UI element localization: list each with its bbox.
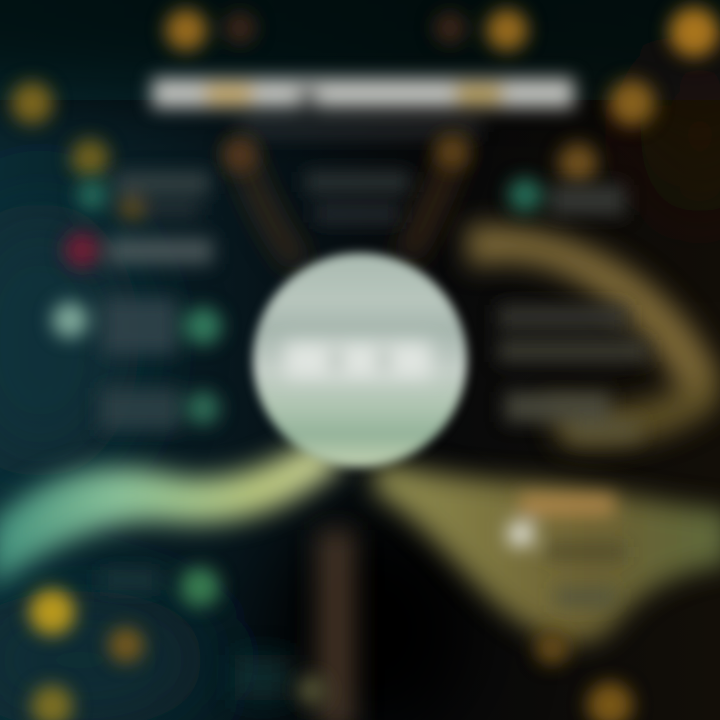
central circle bbox=[253, 253, 467, 467]
title bbox=[152, 78, 574, 136]
left panel: items and icons bbox=[52, 172, 222, 430]
central circle label bbox=[285, 342, 431, 378]
bottom left and lower icons bbox=[29, 567, 633, 720]
wave: right golden ribbon, upper bbox=[465, 225, 720, 448]
wave: left green ribbon bbox=[0, 438, 345, 590]
vertical stem below the circle bbox=[235, 530, 354, 720]
right panel: items and icons bbox=[498, 178, 648, 440]
wave: right golden ribbon, lower bbox=[375, 462, 720, 643]
rays from the top converging on the central circle bbox=[240, 150, 455, 258]
text block: lower right ribbon label bbox=[508, 494, 625, 606]
top centre text block bbox=[305, 172, 410, 223]
top icons bbox=[11, 7, 719, 183]
